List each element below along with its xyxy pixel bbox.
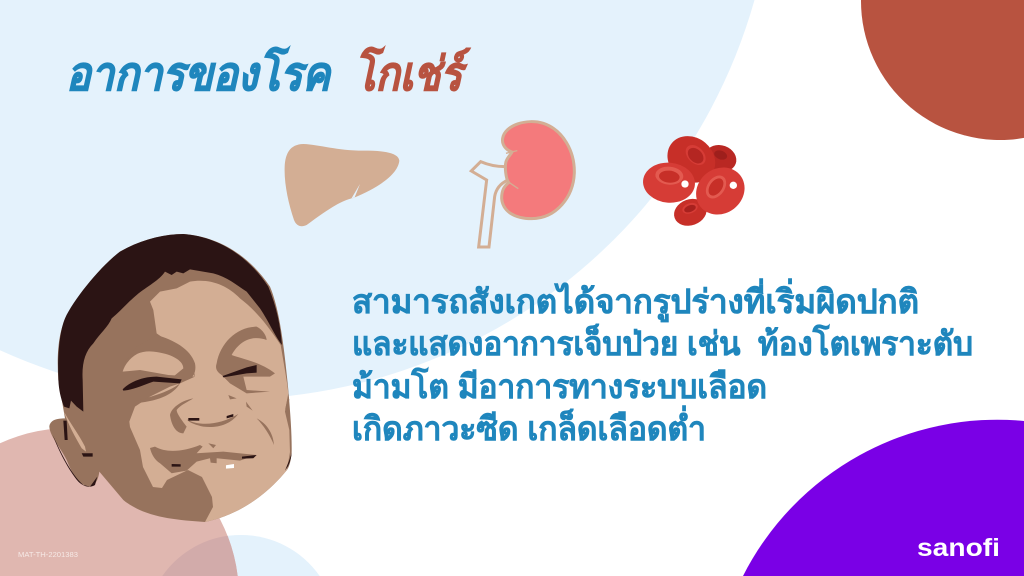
illustration: child's face — [49, 234, 292, 522]
body text line 3: ม้ามโต มีอาการทางระบบเลือด — [352, 367, 767, 405]
icon: kidney — [471, 122, 574, 247]
body text line 1: สามารถสังเกตได้จากรูปร่างที่เริ่มผิดปกติ — [352, 278, 919, 323]
background: pink circle — [0, 428, 238, 576]
background: circle overlap — [162, 536, 238, 576]
material code: MAT-TH-2201383 — [18, 550, 78, 559]
cell: right — [687, 158, 754, 224]
body text — [352, 278, 973, 447]
cell: top — [658, 126, 725, 192]
body text line 4: เกิดภาวะซีด เกล็ดเลือดต่ำ — [352, 405, 706, 447]
face: right eye — [223, 365, 257, 377]
logo: sanofi: sanofi — [917, 534, 1000, 562]
face: hair — [58, 234, 282, 412]
face: mouth — [150, 445, 257, 473]
background: rust circle top right — [861, 0, 1024, 140]
face: left eye — [123, 377, 182, 391]
background: large light blue circle — [0, 0, 754, 400]
cell: back right — [701, 141, 740, 176]
background: small light blue circle — [162, 535, 320, 576]
title: disease symptoms: อาการของโรค — [66, 46, 332, 100]
icon: red blood cells — [641, 126, 754, 230]
cell: bottom — [670, 194, 710, 230]
icon: liver — [285, 144, 399, 226]
kidney: ureter — [471, 162, 508, 247]
cell: left — [641, 160, 697, 205]
title: Gaucher: โกเช่ร์ — [354, 46, 471, 100]
title — [66, 46, 471, 100]
face: smile lines — [208, 395, 289, 448]
face: ear detail — [64, 412, 86, 452]
face: nostril — [188, 414, 233, 421]
face: right eye socket — [216, 327, 275, 393]
face: nose — [170, 398, 193, 433]
face: tooth — [226, 464, 234, 469]
face: light skin area — [129, 281, 290, 522]
body text line 2: และแสดงอาการเจ็บป่วย เช่น ท้องโตเพราะตับ — [352, 323, 973, 362]
kidney: body — [502, 122, 574, 219]
background: purple circle bottom right — [743, 420, 1024, 576]
face: left brow and lid shadow — [123, 351, 195, 377]
face: base skin and ear — [49, 234, 292, 522]
